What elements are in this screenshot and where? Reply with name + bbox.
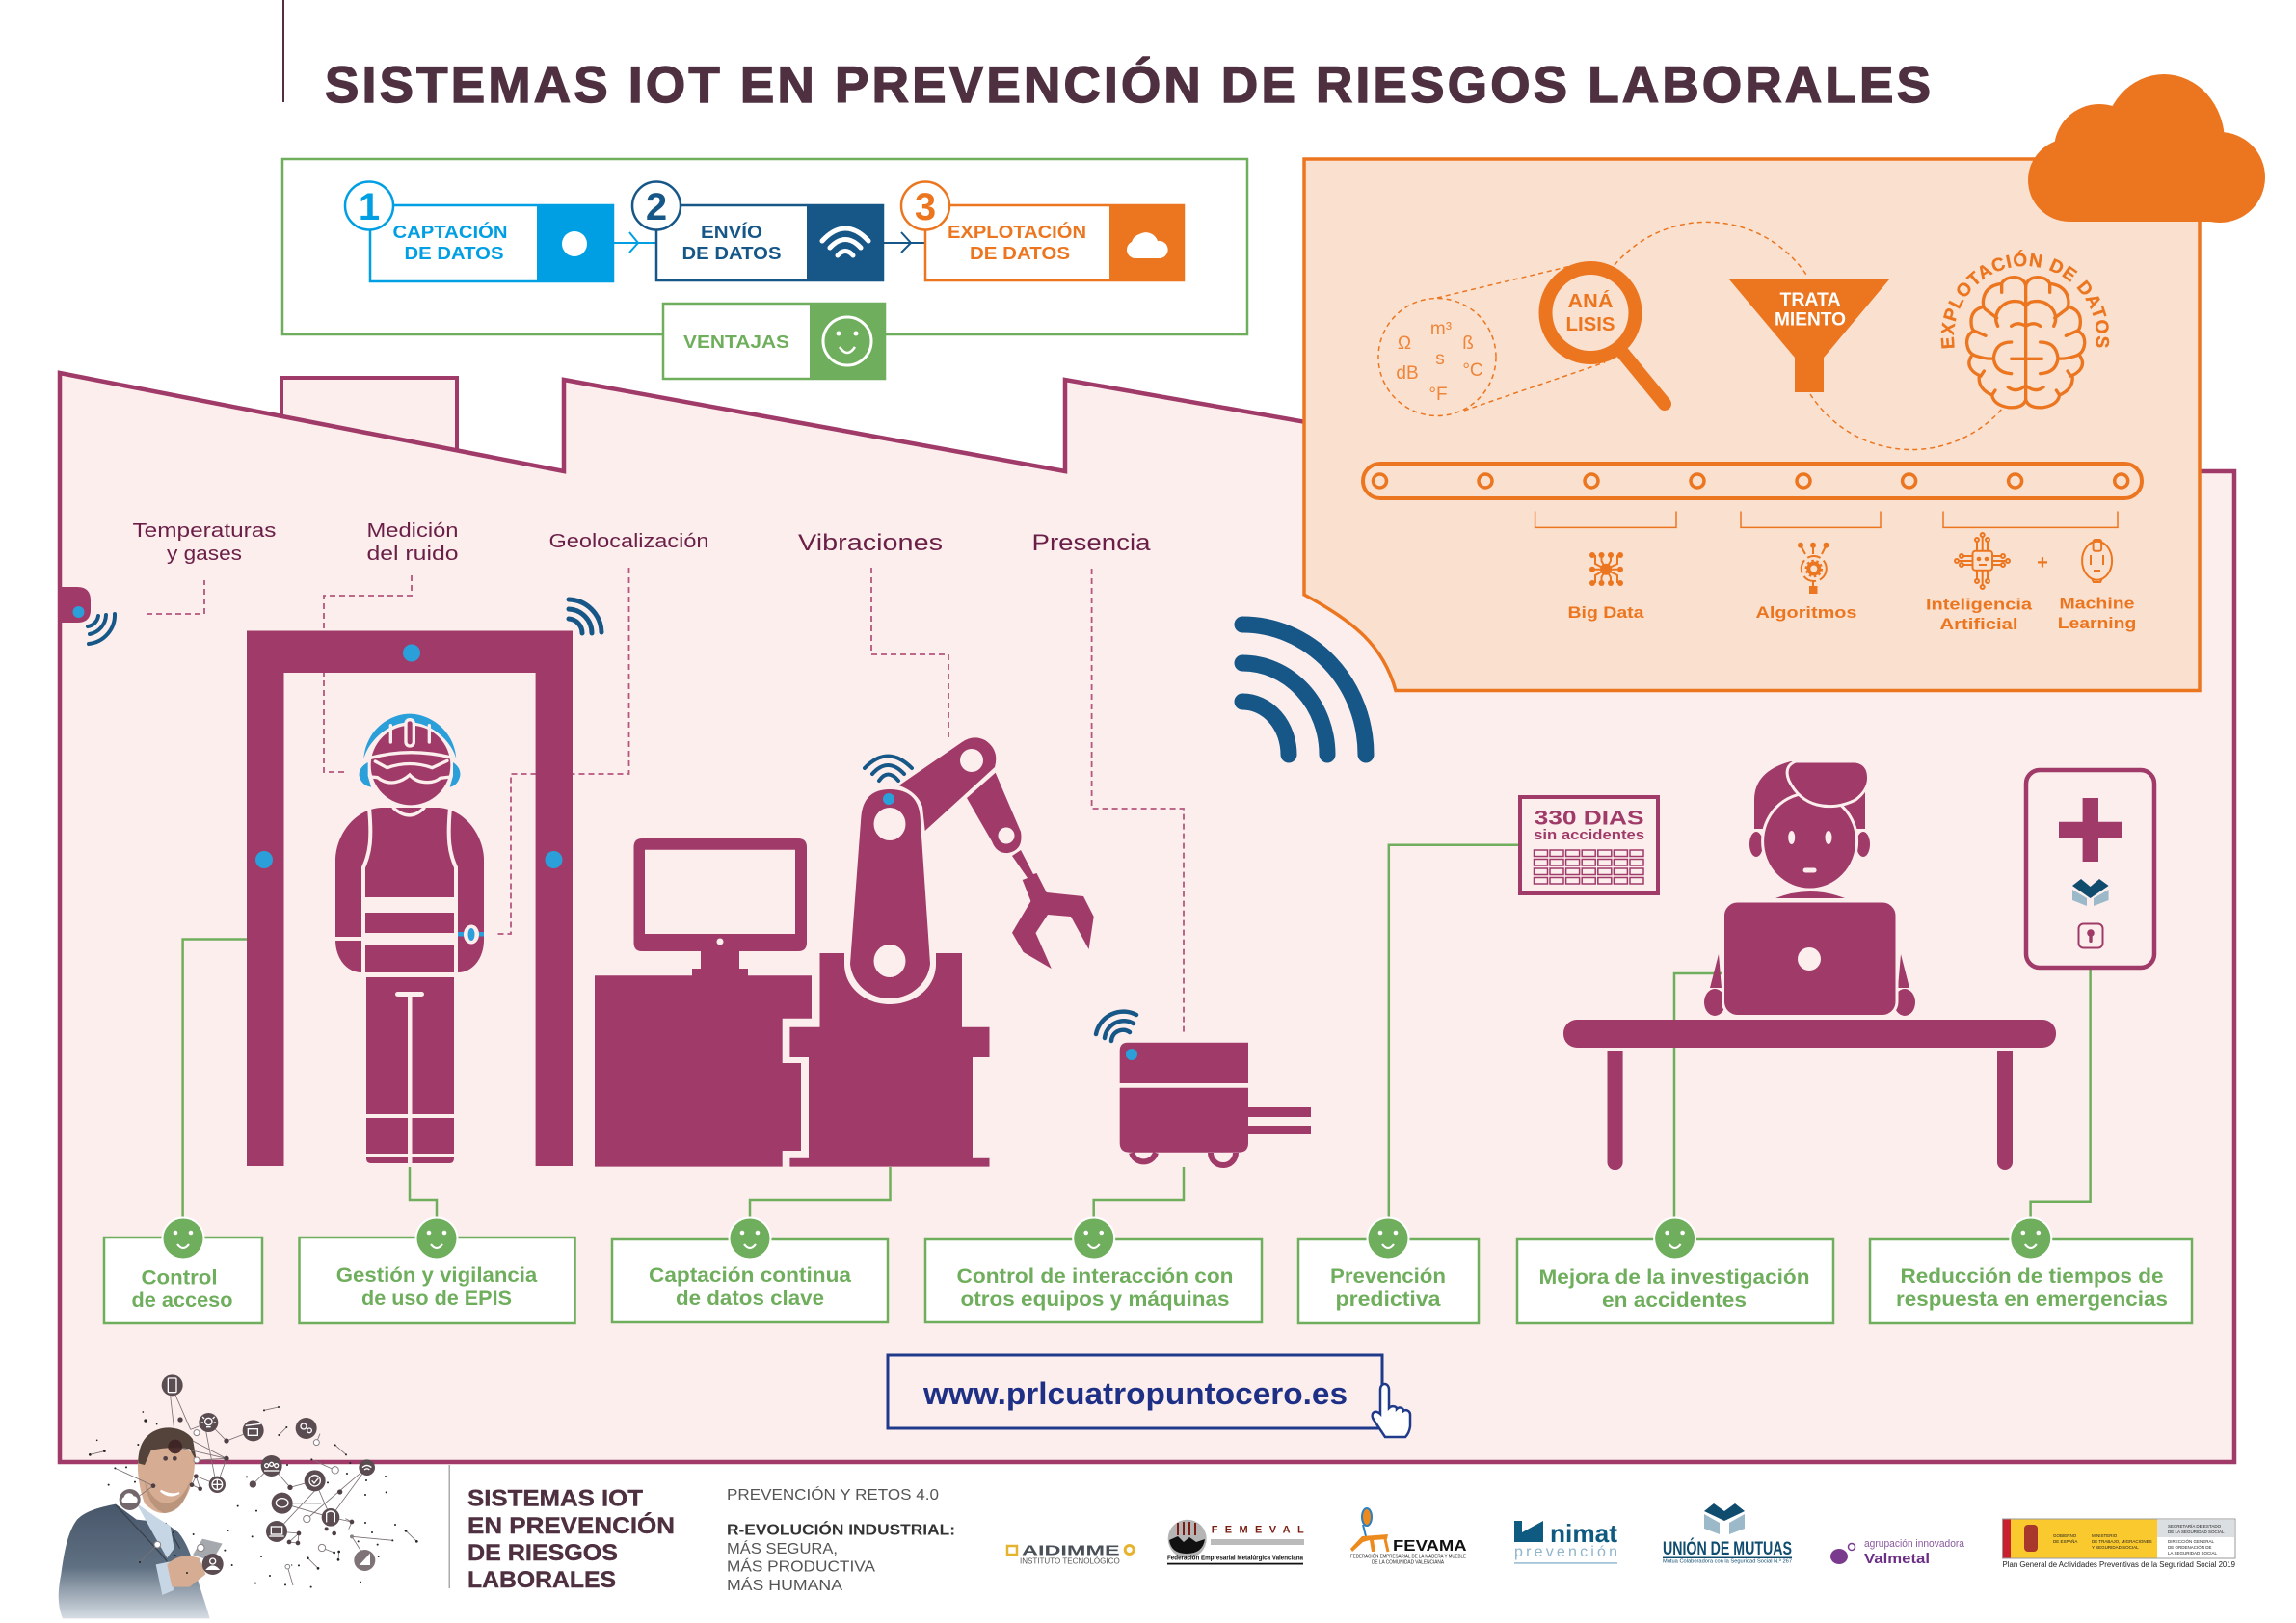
funnel: tratamiento xyxy=(1729,279,1889,392)
step 2: envío de datos xyxy=(632,181,884,281)
panel: process legend xyxy=(282,159,1247,334)
measurement units circle: dB xyxy=(1396,363,1419,384)
dashed sensor connectors xyxy=(147,568,1184,1033)
scattered dots xyxy=(89,1406,418,1588)
benefit: captación continua xyxy=(612,1218,888,1322)
hair back xyxy=(1754,761,1865,829)
labels: ai and ml xyxy=(1926,594,2136,633)
labels: ai and ml: Inteligencia xyxy=(1926,596,2033,613)
worker head and helmet xyxy=(360,714,460,815)
funnel: tratamiento: MIENTO xyxy=(1775,310,1846,330)
magnifier: análisis: LISIS xyxy=(1565,314,1615,335)
logo: valmetal: Valmetal xyxy=(1864,1551,1930,1567)
logo: unimat: prevención xyxy=(1514,1544,1617,1560)
footer illustration: man with network xyxy=(59,1374,418,1618)
benefit: captación continua: Captación continua xyxy=(649,1264,851,1287)
logo: unimat: nimat xyxy=(1550,1519,1617,1548)
icon: robot wifi xyxy=(865,756,912,781)
benefit: gestión y vigilancia: Gestión y vigilancia xyxy=(336,1264,538,1287)
magnifier: análisis: ANÁ xyxy=(1567,290,1614,312)
logo: gobierno de españa: SECRETARÍA DE ESTADO xyxy=(2168,1523,2222,1529)
step 1: captación de datos: DE DATOS xyxy=(405,244,503,263)
benefit: prevención predictiva: Prevención xyxy=(1330,1265,1446,1288)
measurement units circle: ß xyxy=(1462,333,1474,354)
curved label: explotación de datos: EXPLOTACIÓN DE DATOS xyxy=(1941,250,2109,349)
man shirt xyxy=(137,1503,174,1595)
footer subtitle: PREVENCIÓN Y RETOS 4.0 xyxy=(727,1485,939,1503)
footer title: SISTEMAS IOT xyxy=(467,1486,643,1512)
sensor labels: Vibraciones xyxy=(798,530,943,556)
logo: femeval: FEMEVAL xyxy=(1212,1525,1304,1536)
hair top xyxy=(1787,761,1869,807)
url box xyxy=(888,1355,1382,1428)
jaw stubble xyxy=(145,1481,190,1513)
logo: gobierno de españa: GOBIERNO xyxy=(2053,1533,2077,1538)
footer subtitle xyxy=(727,1485,955,1594)
robot arm xyxy=(789,737,1094,1167)
step 2: envío de datos: DE DATOS xyxy=(682,244,781,263)
benefit: mejora de la investigación: Mejora de la investigación xyxy=(1538,1266,1810,1289)
plus sign: + xyxy=(2037,552,2048,573)
benefit: gestión y vigilancia xyxy=(299,1218,574,1323)
access gate xyxy=(247,599,601,1166)
calendar: 330 dias: sin accidentes xyxy=(1534,827,1644,843)
logo: gobierno de españa: DE ORDENACIÓN DE xyxy=(2168,1544,2212,1550)
labels: ai and ml: Artificial xyxy=(1939,615,2018,633)
sensor labels: y gases xyxy=(167,544,242,565)
sensor labels xyxy=(133,520,1151,565)
footer subtitle: R-EVOLUCIÓN INDUSTRIAL: xyxy=(727,1521,955,1539)
benefit: control de interacción: otros equipos y máquinas xyxy=(960,1289,1230,1311)
benefit: control de acceso xyxy=(104,1218,262,1323)
sensor labels: Temperaturas xyxy=(133,520,276,542)
url box: www.prlcuatropuntocero.es xyxy=(922,1376,1348,1411)
logo: gobierno de españa: DIRECCIÓN GENERAL xyxy=(2168,1538,2215,1544)
logo: gobierno de españa: Y SEGURIDAD SOCIAL xyxy=(2092,1545,2139,1550)
shoulders and arms xyxy=(1704,891,1915,1016)
upper arm xyxy=(899,737,1021,853)
step 3: explotación de datos: DE DATOS xyxy=(970,244,1070,263)
brain icon xyxy=(1967,278,2085,408)
measurement units circle: Ω xyxy=(1398,333,1411,354)
labels: ai and ml: Learning xyxy=(2058,614,2136,632)
logo: unión de mutuas: Mutua Colaboradora con la Seguridad Social N.º 267 xyxy=(1663,1558,1792,1565)
measurement units circle xyxy=(1378,265,1605,416)
vest markings xyxy=(335,808,456,973)
logo: aidimme: INSTITUTO TECNOLÓGICO xyxy=(1020,1556,1120,1566)
gripper xyxy=(1012,850,1094,969)
logo: unión de mutuas xyxy=(1663,1503,1792,1565)
logo: fevama: DE LA COMUNIDAD VALENCIANA xyxy=(1372,1560,1444,1566)
measurement units circle: °F xyxy=(1428,385,1448,405)
logo: gobierno de españa: LA SEGURIDAD SOCIAL xyxy=(2168,1551,2218,1556)
benefit: gestión y vigilancia: de uso de EPIS xyxy=(361,1288,512,1310)
icon: cart wifi xyxy=(1096,1012,1136,1041)
icon: algoritmos xyxy=(1798,543,1829,594)
icon: machine learning head xyxy=(2082,540,2112,582)
logo: aidimme xyxy=(1007,1543,1134,1566)
measurement units circle: s xyxy=(1435,349,1445,369)
network links xyxy=(90,1395,416,1585)
footer subtitle: MÁS PRODUCTIVA xyxy=(727,1557,875,1576)
sensor labels: Presencia xyxy=(1031,530,1151,556)
worker body xyxy=(335,808,484,972)
laptop xyxy=(1723,901,1897,1016)
arrow: step 2 to step 3 xyxy=(883,232,925,253)
logo: fevama xyxy=(1350,1508,1467,1566)
arrow: step 1 to step 2 xyxy=(613,232,656,253)
icon: gate wifi xyxy=(569,599,601,633)
measurement units circle: m³ xyxy=(1430,319,1452,339)
logo: gobierno de españa: Plan General de Actividades Preventivas de la Seguridad Social 2019 xyxy=(2003,1560,2236,1569)
footer title xyxy=(467,1486,675,1593)
logo: gobierno de españa: MINISTERIO xyxy=(2092,1533,2118,1538)
cabinet xyxy=(595,975,812,1167)
step 2: envío de datos: 2 xyxy=(646,186,667,228)
brackets xyxy=(1535,511,2118,527)
green benefit connectors xyxy=(183,845,2091,1219)
benefit: reducción de tiempos xyxy=(1870,1218,2192,1323)
cloud node xyxy=(120,1489,141,1510)
wrist sensor xyxy=(458,925,484,945)
step 1: captación de datos: 1 xyxy=(359,186,380,228)
office worker at desk xyxy=(1563,761,2056,1170)
facial features xyxy=(1788,831,1831,873)
dashed flow arcs xyxy=(1615,222,2003,450)
calendar: 330 dias: 330 DIAS xyxy=(1535,808,1644,830)
step 3: explotación de datos: EXPLOTACIÓN xyxy=(948,222,1086,242)
step 3: explotación de datos: 3 xyxy=(915,186,936,228)
icon: big data xyxy=(1589,552,1623,586)
logo: fevama: FEVAMA xyxy=(1393,1538,1467,1555)
worker legs xyxy=(366,977,454,1163)
benefit: control de acceso: de acceso xyxy=(131,1290,233,1312)
benefit: prevención predictiva xyxy=(1298,1218,1479,1323)
worker figure xyxy=(335,714,484,1163)
sensor labels: del ruido xyxy=(366,544,459,565)
logo: unión de mutuas: UNIÓN DE MUTUAS xyxy=(1663,1538,1792,1559)
benefit: control de interacción xyxy=(925,1218,1262,1322)
benefit: control de interacción: Control de interacción con xyxy=(956,1265,1234,1288)
label: algoritmos: Algoritmos xyxy=(1756,603,1856,622)
footer subtitle: MÁS HUMANA xyxy=(727,1576,842,1594)
logo: femeval xyxy=(1167,1520,1304,1565)
icon: medical cross xyxy=(2059,798,2122,862)
step 2: envío de datos: ENVÍO xyxy=(701,222,762,242)
logo: gobierno de españa xyxy=(2003,1519,2236,1569)
man neck and head xyxy=(138,1448,195,1513)
ring markers xyxy=(154,1430,338,1569)
footer subtitle: MÁS SEGURA, xyxy=(727,1539,838,1557)
man smile xyxy=(161,1491,179,1496)
laptop logo xyxy=(1798,947,1821,971)
logo: fevama: FEDERACIÓN EMPRESARIAL DE LA MADERA Y MUEBLE xyxy=(1350,1554,1466,1560)
magnifier: análisis xyxy=(1546,268,1665,404)
conveyor belt xyxy=(1363,464,2142,498)
title accent line xyxy=(282,0,284,102)
dark node on forehead xyxy=(168,1440,182,1453)
sensor labels: Geolocalización xyxy=(549,531,709,552)
calendar: 330 dias xyxy=(1520,797,1658,893)
man jacket xyxy=(59,1504,210,1618)
benefit: reducción de tiempos: respuesta en emergencias xyxy=(1896,1289,2168,1311)
logo: valmetal: agrupación innovadora xyxy=(1864,1538,1965,1550)
factory building outline xyxy=(60,373,2234,1462)
node icons xyxy=(168,1378,371,1569)
title: SISTEMAS IOT EN PREVENCIÓN DE RIESGOS LABORALES xyxy=(325,56,1931,114)
footer title: EN PREVENCIÓN xyxy=(467,1512,675,1539)
phone app xyxy=(2026,770,2154,968)
step 1: captación de datos xyxy=(345,181,614,282)
icon: artificial intelligence chip xyxy=(1955,533,2010,589)
benefit: prevención predictiva: predictiva xyxy=(1336,1289,1441,1311)
benefit: mejora de la investigación: en accidentes xyxy=(1602,1290,1747,1312)
robot base xyxy=(789,953,989,1167)
icon: lock button xyxy=(2078,923,2103,948)
face xyxy=(1763,793,1857,890)
ears xyxy=(1749,832,1870,857)
monitor xyxy=(634,838,807,977)
desk xyxy=(1563,1020,2056,1170)
icon: hand cursor xyxy=(1373,1384,1410,1437)
footer title: DE RIESGOS xyxy=(467,1540,618,1566)
man hand and phone xyxy=(167,1539,223,1587)
cart machine xyxy=(1096,1012,1311,1165)
funnel: tratamiento: TRATA xyxy=(1779,290,1841,310)
monitor and cabinet xyxy=(595,838,812,1167)
network nodes xyxy=(162,1374,375,1575)
icon: mutuas logo xyxy=(2072,879,2109,906)
step 3: explotación de datos xyxy=(901,181,1185,281)
ventajas tab: VENTAJAS xyxy=(683,333,789,352)
label: big data: Big Data xyxy=(1567,603,1644,622)
benefit: mejora de la investigación xyxy=(1517,1218,1833,1323)
big wifi symbol xyxy=(1242,625,1366,755)
step 1: captación de datos: CAPTACIÓN xyxy=(393,222,507,242)
man hair xyxy=(138,1427,197,1465)
logo: unimat xyxy=(1514,1519,1617,1564)
logo: aidimme: AIDIMME xyxy=(1022,1543,1120,1558)
benefit: control de acceso: Control xyxy=(141,1267,218,1290)
logo: gobierno de españa: DE ESPAÑA xyxy=(2053,1538,2077,1544)
orange data panel xyxy=(1302,74,2265,692)
sensor labels: Medición xyxy=(366,520,459,542)
extra network nodes xyxy=(151,1417,354,1545)
big cloud xyxy=(2028,74,2265,223)
logo: femeval: Federación Empresarial Metalúrgica Valenciana xyxy=(1167,1556,1303,1562)
jacket lapel xyxy=(116,1505,180,1561)
wall sensor xyxy=(60,587,115,644)
ventajas tab xyxy=(663,304,886,380)
benefit: reducción de tiempos: Reducción de tiempos de xyxy=(1901,1265,2163,1288)
footer title: LABORALES xyxy=(467,1567,616,1593)
lower arm xyxy=(844,953,936,1004)
logo: gobierno de españa: DE LA SEGURIDAD SOCIAL xyxy=(2168,1530,2225,1534)
measurement units circle: °C xyxy=(1462,360,1483,381)
logo: gobierno de españa: DE TRABAJO, MIGRACIONES xyxy=(2092,1539,2152,1544)
logo: valmetal xyxy=(1830,1538,1965,1567)
labels: ai and ml: Machine xyxy=(2059,594,2134,613)
footer divider xyxy=(449,1465,450,1588)
benefit: captación continua: de datos clave xyxy=(676,1288,824,1310)
